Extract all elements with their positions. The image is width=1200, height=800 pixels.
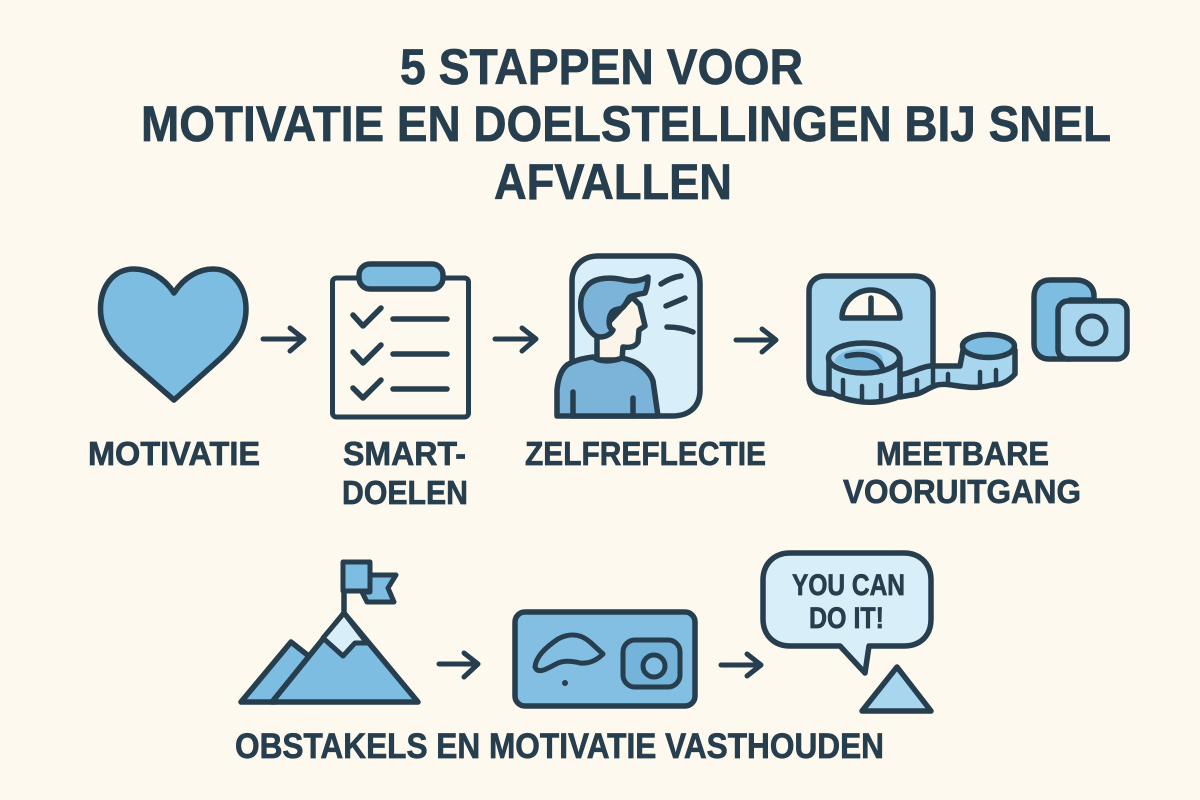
title: MOTIVATIE EN DOELSTELLINGEN BIJ SNEL bbox=[141, 96, 1111, 152]
label: meetbare vooruitgang: VOORUITGANG bbox=[843, 473, 1081, 510]
label: meetbare vooruitgang bbox=[843, 435, 1081, 510]
label: obstakels en motivatie vasthouden: OBSTAKELS EN MOTIVATIE VASTHOUDEN bbox=[235, 727, 884, 766]
arrow: card to speech bubble bbox=[721, 654, 761, 676]
speech bubble: DO IT! bbox=[809, 602, 884, 635]
label: smart-doelen bbox=[342, 435, 468, 511]
speech bubble: YOU CAN bbox=[792, 569, 905, 602]
title bbox=[141, 39, 1111, 210]
icon: clipboard checklist bbox=[332, 264, 468, 417]
icon: camera with photo bbox=[1034, 280, 1127, 359]
label: smart-doelen: DOELEN bbox=[342, 474, 468, 511]
arrow: motivatie to smart-doelen bbox=[263, 328, 304, 351]
label: meetbare vooruitgang: MEETBARE bbox=[876, 435, 1049, 472]
icon: small triangle bbox=[862, 667, 931, 711]
label: motivatie: MOTIVATIE bbox=[88, 435, 260, 472]
icon: heart bbox=[100, 269, 246, 400]
arrow: mountain to card bbox=[439, 653, 478, 677]
icon: scale and measuring tape bbox=[809, 276, 1015, 402]
arrow: zelfreflectie to meetbare vooruitgang bbox=[736, 329, 776, 352]
arrow: smart-doelen to zelfreflectie bbox=[495, 328, 536, 351]
title: 5 STAPPEN VOOR bbox=[400, 39, 803, 95]
label: zelfreflectie: ZELFREFLECTIE bbox=[525, 435, 766, 472]
label: smart-doelen: SMART- bbox=[343, 435, 466, 472]
title: AFVALLEN bbox=[494, 154, 732, 210]
icon: card with map and camera bbox=[515, 612, 695, 706]
icon: person in mirror bbox=[557, 256, 700, 416]
speech bubble bbox=[763, 553, 931, 673]
icon: mountain with flag bbox=[241, 562, 418, 702]
